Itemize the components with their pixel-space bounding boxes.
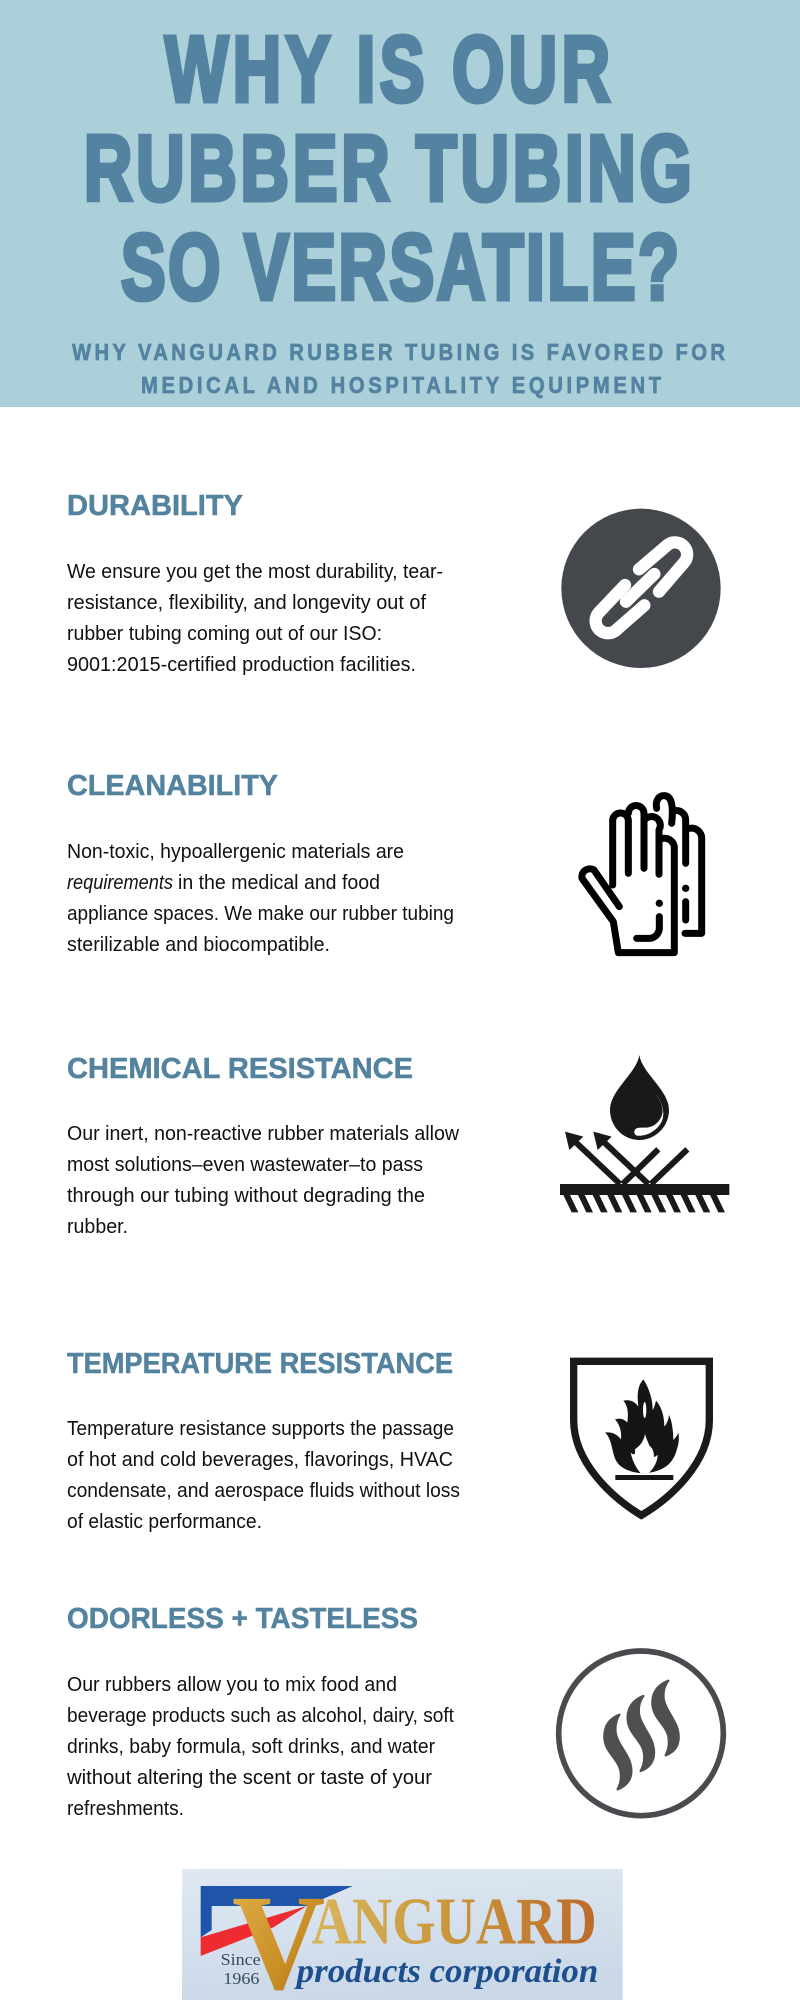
text block: chemical resistance: Our inert, non-reactive rubber materials allow [67,1123,460,1145]
subtitle: WHY VANGUARD RUBBER TUBING IS FAVORED FOR [72,339,725,365]
text block: odorless and tasteless: without altering the scent or taste of your [66,1767,432,1789]
title: WHY IS OUR [165,18,610,122]
text block: cleanability [67,841,454,956]
heading: temperature resistance: TEMPERATURE RESISTANCE [67,1348,453,1380]
text block: cleanability: requirements [67,872,173,894]
title: SO VERSATILE? [121,216,679,320]
panel: odorless and tasteless [66,1603,723,1820]
text block: odorless and tasteless: drinks, baby formula, soft drinks, and water [67,1736,435,1758]
text block: odorless and tasteless: Our rubbers allow you to mix food and [67,1674,397,1696]
text block: temperature resistance: Temperature resistance supports the passage [67,1418,454,1440]
text block: durability: 9001:2015-certified production facilities. [67,654,416,676]
icon: chain link [561,509,721,668]
subtitle [72,339,725,398]
text block: chemical resistance: through our tubing without degrading the [67,1185,425,1207]
panel: temperature resistance [67,1348,709,1533]
panel: durability [67,490,721,676]
icon: flame shield [574,1361,709,1515]
text block: cleanability: in the medical and food [178,872,380,894]
heading: odorless and tasteless: ODORLESS + TASTELESS [67,1603,418,1635]
icon: scent wisps [559,1651,723,1816]
panel: header band [0,0,800,407]
heading: chemical resistance: CHEMICAL RESISTANCE [67,1053,413,1085]
wordmark: products corporation [294,1953,598,1990]
text block: temperature resistance: of elastic performance. [67,1511,262,1533]
title: RUBBER TUBING [84,117,692,221]
panel: cleanability [67,770,702,956]
text block: cleanability: Non-toxic, hypoallergenic materials are [67,841,404,863]
wordmark: 1966 [223,1969,260,1988]
heading: cleanability: CLEANABILITY [67,770,278,802]
text block: odorless and tasteless [66,1674,454,1820]
icon: gloves [582,796,702,953]
text block: temperature resistance: of hot and cold beverages, flavorings, HVAC [67,1449,453,1471]
heading: durability: DURABILITY [67,490,243,522]
text block: temperature resistance: condensate, and aerospace fluids without loss [67,1480,460,1502]
text block: durability [67,561,443,676]
text block: durability: rubber tubing coming out of our ISO: [67,623,382,645]
wordmark: Since [221,1950,261,1969]
subtitle: MEDICAL AND HOSPITALITY EQUIPMENT [141,372,661,398]
title [84,18,692,320]
text block: chemical resistance: most solutions–even wastewater–to pass [67,1154,423,1176]
text block: chemical resistance [67,1123,460,1238]
text block: durability: We ensure you get the most durability, tear- [67,561,443,583]
panel: chemical resistance [67,1053,729,1238]
text block: chemical resistance: rubber. [67,1216,128,1238]
text block: odorless and tasteless: refreshments. [67,1798,184,1820]
wordmark [221,1866,598,2000]
text block: cleanability: sterilizable and biocompatible. [67,934,330,956]
wordmark: ANGUARD [312,1885,597,1958]
text block: durability: resistance, flexibility, and longevity out of [67,592,426,614]
flag mark [201,1886,353,1956]
text block: cleanability: appliance spaces. We make our rubber tubing [67,903,454,925]
logo: Vanguard Products Corporation [182,1866,623,2000]
icon: drop repelled from surface [560,1055,729,1212]
text block: odorless and tasteless: beverage products such as alcohol, dairy, soft [67,1705,454,1727]
text block: temperature resistance [67,1418,460,1533]
